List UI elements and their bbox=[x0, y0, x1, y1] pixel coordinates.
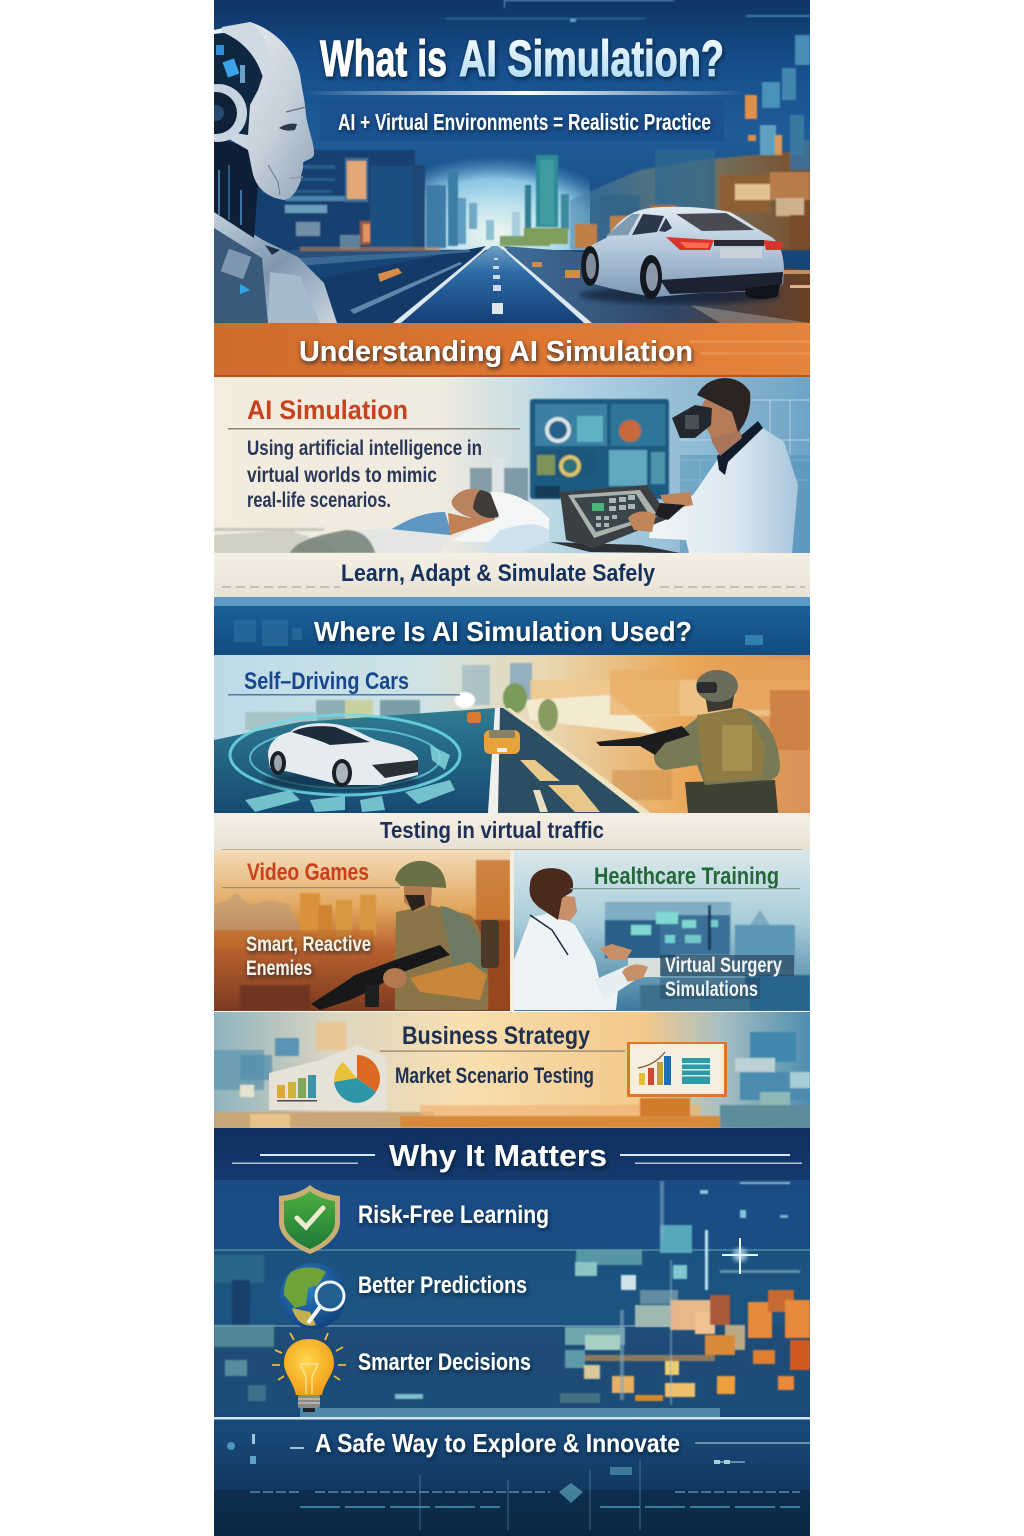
distant buildings bbox=[470, 458, 528, 508]
panel: business strategy bbox=[214, 1012, 810, 1128]
heading rules bbox=[232, 1154, 802, 1164]
control console bbox=[550, 485, 680, 553]
heading rule bbox=[222, 887, 400, 888]
closing tagline: A Safe Way to Explore & Innovate bbox=[315, 1428, 680, 1458]
heading: healthcare training: Healthcare Training bbox=[594, 863, 779, 890]
title bbox=[320, 30, 724, 87]
heading: business strategy: Business Strategy bbox=[402, 1022, 590, 1050]
foreground haze bbox=[214, 528, 375, 553]
heading: video games: Video Games bbox=[247, 859, 369, 886]
caption strip: testing in virtual traffic bbox=[214, 813, 810, 850]
title: What is bbox=[320, 30, 447, 87]
body text bbox=[247, 440, 481, 507]
background tech grid bbox=[680, 400, 810, 486]
body text: Using artificial intelligence in bbox=[247, 437, 482, 460]
icon: green shield with check bbox=[279, 1185, 340, 1254]
label: risk-free learning: Risk-Free Learning bbox=[358, 1201, 549, 1229]
hands on console bbox=[628, 492, 693, 532]
section header: understanding bbox=[214, 323, 810, 377]
tagline strip: Learn, Adapt & Simulate Safely bbox=[341, 560, 656, 587]
body text: virtual worlds to mimic bbox=[247, 464, 437, 487]
icon: light bulb bbox=[272, 1333, 346, 1412]
medical data mosaic bbox=[605, 902, 810, 1011]
doctor in VR headset bbox=[649, 378, 798, 553]
robot head bbox=[214, 22, 314, 200]
panel: healthcare training bbox=[514, 850, 810, 1011]
left mosaic bbox=[214, 1255, 423, 1401]
caption: virtual surgery simulations: Simulations bbox=[665, 978, 758, 1001]
bottom circuit lines bbox=[227, 1434, 810, 1530]
skyline towers bbox=[486, 155, 569, 246]
road bbox=[488, 708, 651, 813]
caption: smart reactive enemies bbox=[246, 933, 371, 980]
bar chart bbox=[277, 1075, 317, 1102]
mosaic tiles bbox=[214, 1022, 810, 1128]
VR headset bbox=[672, 405, 712, 438]
section header: where is AI simulation used: Where Is AI Simulation Used? bbox=[314, 616, 692, 647]
right city mosaic bbox=[445, 0, 810, 250]
lab coat bbox=[649, 425, 798, 553]
subtitle band bbox=[320, 100, 724, 142]
robot neck machinery bbox=[214, 135, 258, 238]
panel: hero header bbox=[189, 0, 810, 324]
tagline strip bbox=[214, 553, 810, 597]
card: chart and pie bbox=[269, 1045, 387, 1110]
section header: understanding: Understanding AI Simulation bbox=[299, 336, 693, 368]
robot ear unit bbox=[214, 84, 247, 142]
bottom rule bbox=[214, 1417, 810, 1420]
heading: why it matters: Why It Matters bbox=[389, 1138, 607, 1173]
caption strip: testing in virtual traffic: Testing in virtual traffic bbox=[380, 817, 604, 843]
sky glow bbox=[424, 158, 590, 250]
title: AI Simulation? bbox=[459, 30, 724, 87]
icon: white car bbox=[262, 723, 418, 790]
soldier with rifle bbox=[596, 670, 780, 813]
title rule bbox=[304, 91, 748, 95]
light band above rule bbox=[300, 1408, 720, 1417]
neck and face bbox=[710, 429, 742, 456]
caption: market scenario testing: Market Scenario Testing bbox=[395, 1063, 594, 1088]
heading rule bbox=[228, 694, 460, 696]
patient on bed bbox=[356, 488, 549, 553]
body text: real-life scenarios. bbox=[247, 489, 391, 512]
panel: self-driving cars bbox=[214, 655, 810, 813]
heading: AI Simulation: AI Simulation bbox=[247, 395, 408, 425]
subtitle band: AI + Virtual Environments = Realistic Practice bbox=[338, 109, 711, 135]
left city buildings bbox=[250, 150, 490, 258]
card: analytics bbox=[627, 1042, 727, 1097]
sparkle bbox=[722, 1238, 758, 1274]
caption: virtual surgery simulations: Virtual Surgery bbox=[665, 954, 782, 977]
caption: virtual surgery simulations bbox=[660, 954, 794, 1001]
right mosaic data tiles bbox=[560, 1181, 810, 1405]
ground with sensor rings bbox=[214, 708, 495, 813]
orange skyline bbox=[214, 860, 510, 1010]
ground and road bbox=[320, 246, 486, 292]
armed soldier bbox=[311, 861, 499, 1010]
robot figure bbox=[214, 22, 337, 323]
yellow cars bbox=[467, 712, 520, 754]
hair bbox=[697, 378, 750, 432]
icon: globe with magnifier bbox=[280, 1263, 346, 1329]
panel: why it matters bbox=[214, 1128, 810, 1536]
panel: understanding AI simulation bbox=[214, 377, 810, 553]
city background bbox=[245, 660, 810, 800]
label: better predictions: Better Predictions bbox=[358, 1272, 527, 1299]
monitor bbox=[530, 399, 669, 499]
section header: where is AI simulation used bbox=[214, 597, 810, 655]
robot shoulder armor bbox=[214, 210, 337, 323]
panel: video games bbox=[214, 850, 510, 1011]
heading rule bbox=[228, 428, 520, 430]
divider bbox=[510, 850, 514, 1011]
pie chart bbox=[334, 1055, 380, 1103]
icon: car rear view bbox=[580, 207, 784, 304]
background bands bbox=[214, 1180, 810, 1536]
doctor with tablet bbox=[514, 868, 661, 1010]
caption: smart reactive enemies: Smart, Reactive bbox=[246, 933, 371, 956]
heading rule bbox=[570, 888, 800, 889]
heading: self-driving cars: Self–Driving Cars bbox=[244, 668, 409, 695]
caption: smart reactive enemies: Enemies bbox=[246, 957, 312, 980]
heading rule bbox=[380, 1050, 625, 1052]
label: smarter decisions: Smarter Decisions bbox=[358, 1349, 531, 1376]
